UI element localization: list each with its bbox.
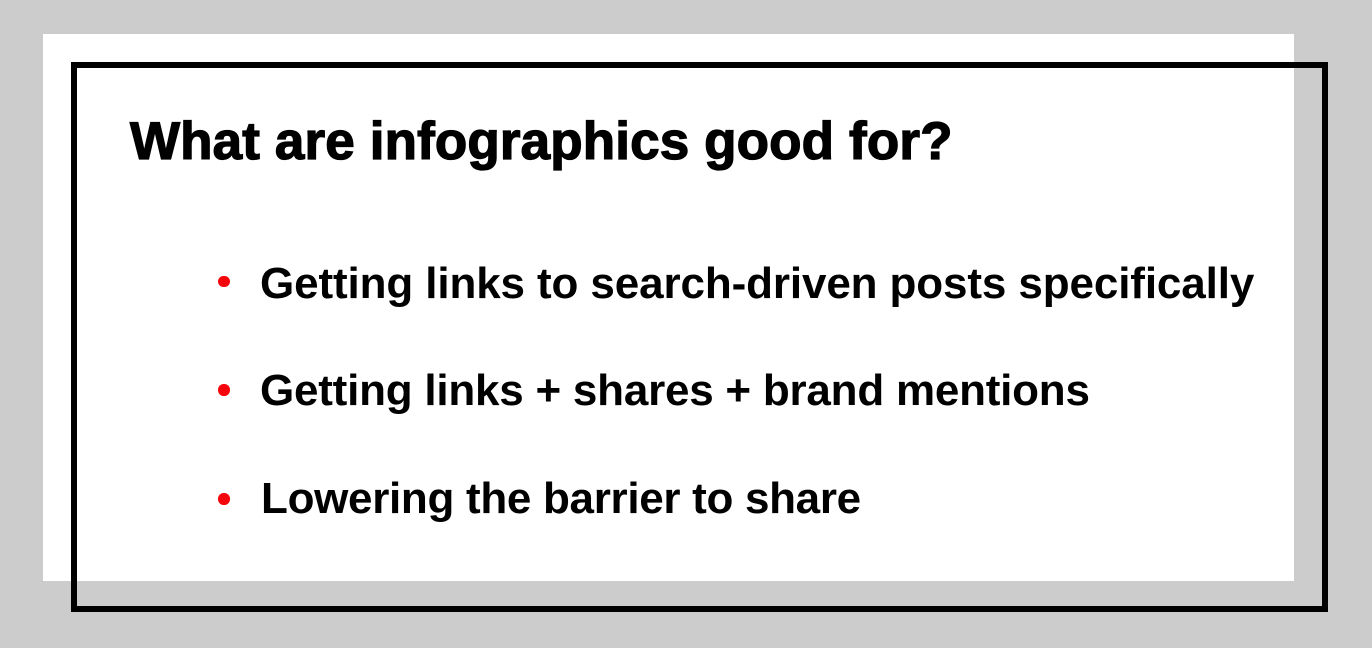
black outline frame [71, 62, 1328, 612]
title: What are infographics good for? [130, 112, 953, 171]
bullet list [218, 259, 1254, 523]
bullet 3 marker [218, 493, 230, 504]
bullet 2 marker [218, 384, 230, 396]
bullet 3 text: Lowering the barrier to share [261, 474, 861, 523]
bullet 1 text: Getting links to search-driven posts specifically [260, 259, 1254, 308]
bullet 2 text: Getting links + shares + brand mentions [260, 366, 1090, 415]
bullet 1 marker [218, 276, 230, 287]
white panel [43, 34, 1294, 581]
